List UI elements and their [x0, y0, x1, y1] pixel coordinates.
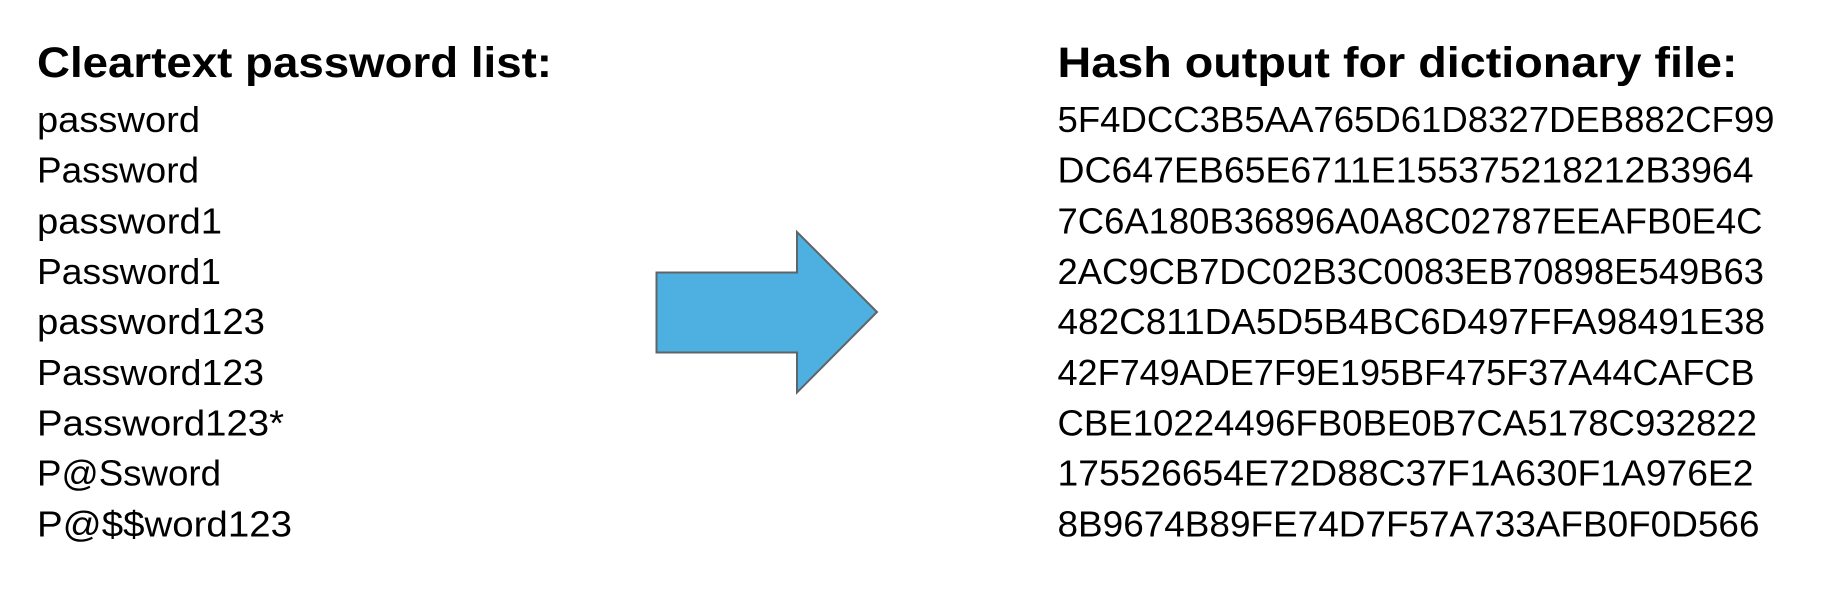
arrow: cleartext to hash: [656, 232, 877, 392]
hash entries: 5F4DCC3B5AA765D61D8327DEB882CF99: [1058, 99, 1774, 140]
password entries: Password: [37, 150, 199, 190]
heading: cleartext password list: Cleartext password list:: [37, 39, 552, 87]
panel: cleartext password list: [37, 39, 552, 544]
password entries: password123: [37, 301, 265, 342]
hash entries: 42F749ADE7F9E195BF475F37A44CAFCB: [1058, 352, 1754, 393]
password entries: password: [37, 99, 200, 140]
hash entries: DC647EB65E6711E155375218212B3964: [1058, 150, 1754, 190]
password entries: P@$$word123: [37, 504, 292, 544]
password entries: Password1: [37, 251, 221, 292]
password entries: password1: [37, 200, 222, 242]
panel: hash output for dictionary file: [1058, 39, 1774, 544]
hash entries: 8B9674B89FE74D7F57A733AFB0F0D566: [1058, 504, 1760, 544]
hash entries: 175526654E72D88C37F1A630F1A976E2: [1058, 452, 1754, 494]
hash entries: 482C811DA5D5B4BC6D497FFA98491E38: [1058, 301, 1765, 342]
hash entries: 2AC9CB7DC02B3C0083EB70898E549B63: [1058, 251, 1764, 292]
hash entries: [1058, 99, 1774, 544]
password entries: [37, 99, 292, 544]
password entries: P@Ssword: [37, 452, 221, 494]
password entries: Password123*: [37, 402, 284, 444]
password entries: Password123: [37, 352, 264, 393]
hash entries: CBE10224496FB0BE0B7CA5178C932822: [1058, 402, 1757, 444]
heading: hash output for dictionary file: Hash output for dictionary file:: [1058, 39, 1738, 87]
hash entries: 7C6A180B36896A0A8C02787EEAFB0E4C: [1058, 200, 1762, 242]
